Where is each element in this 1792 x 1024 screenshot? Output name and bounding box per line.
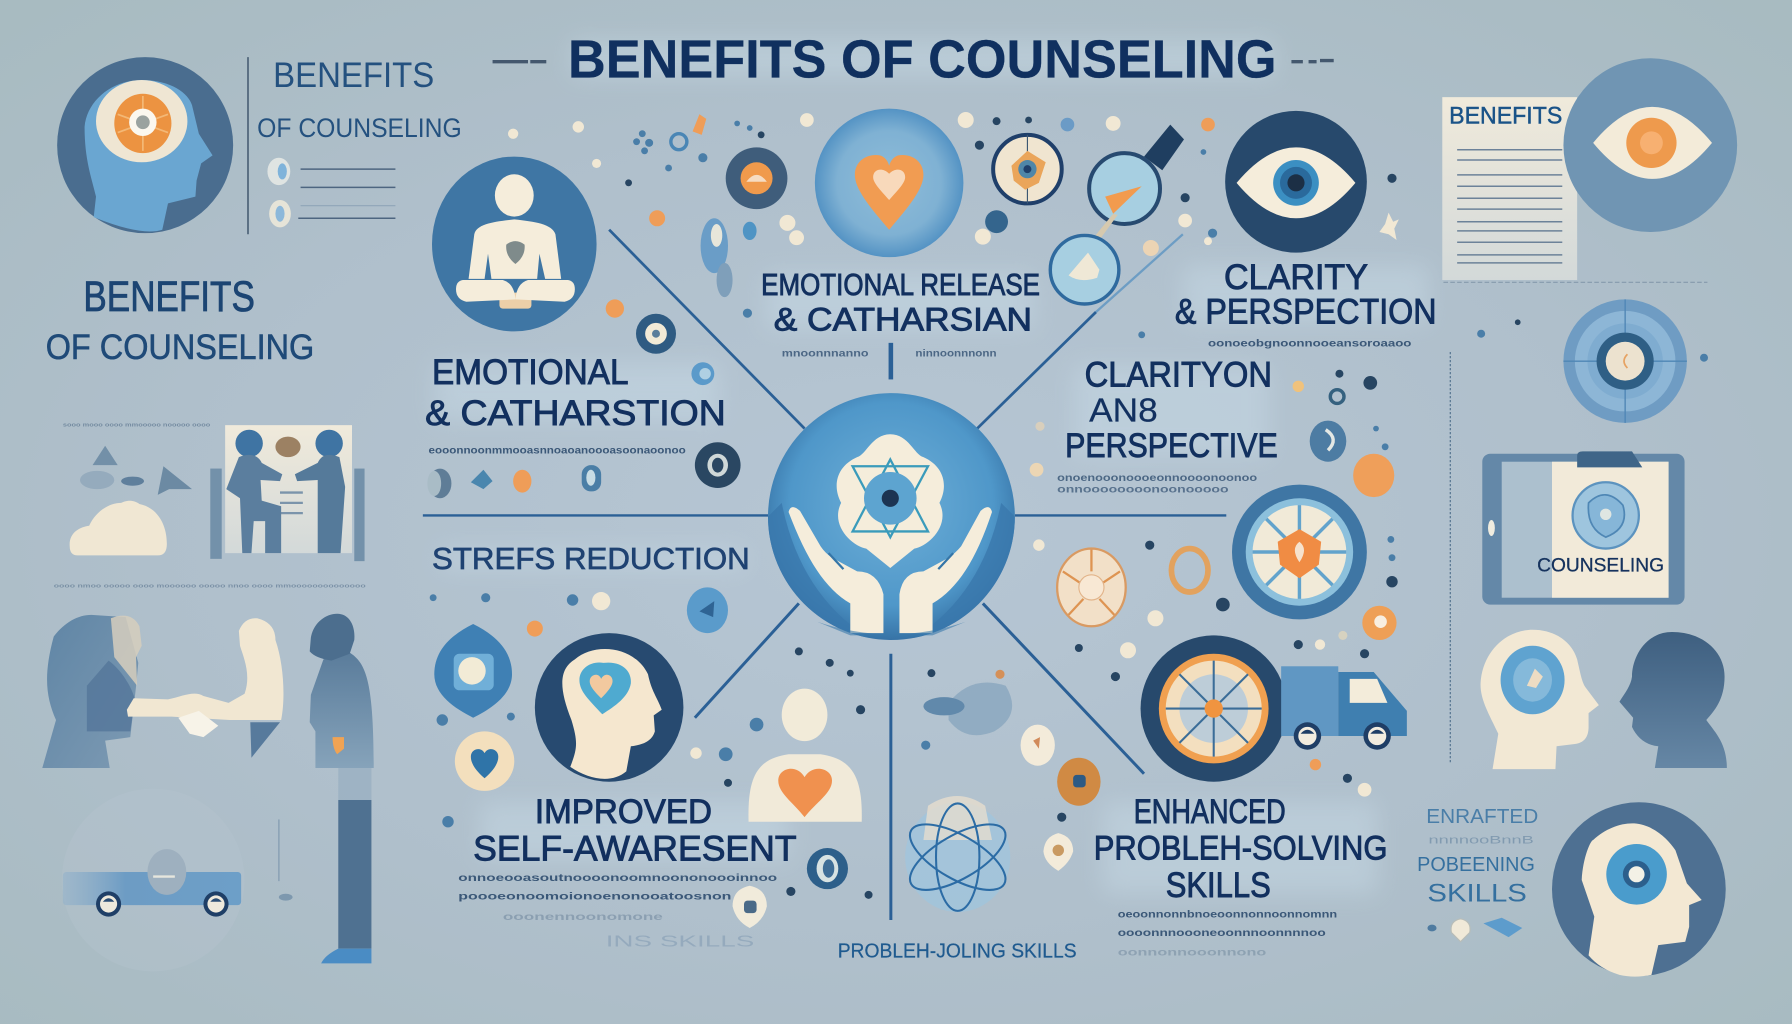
icon: wire globe [900,796,1015,912]
icon: top-left head with brain [57,57,233,233]
panel: clipboard counseling [1482,451,1685,605]
heading: clarityon and perspective: PERSPECTIVE [1065,427,1278,465]
heading: improved self-awareness [458,793,797,950]
icon: steel-blue eye circle [1563,58,1737,232]
icon: heart circle [815,109,963,257]
icon: ringed target [993,135,1062,203]
heading: stress reduction: STREFS REDUCTION [432,541,750,576]
right faded caption [1417,805,1538,942]
illustration: handshake scene [42,614,374,963]
heading: improved self-awareness: onnoeooasoutnoooonoomnoononoooinnoo [458,873,777,884]
heading: clarity and perspection: & PERSPECTION [1175,291,1437,331]
heading: emotional and catharstion [425,352,726,457]
heading: emotional and catharstion: & CATHARSTION [425,393,726,433]
heading: enhanced problem-solving skills: SKILLS [1166,865,1271,905]
right faded caption: ENRAFTED [1426,805,1538,828]
heading: clarityon and perspective: AN8 [1089,393,1158,430]
right faded caption: POBEENING [1417,853,1535,876]
icon: bottom-right head with eye [1552,802,1726,977]
heading: improved self-awareness: INS SKILLS [606,933,754,950]
icon: blue leaf badge [434,624,512,718]
left large heading: BENEFITS [83,273,255,320]
icon: problem solving wheel [1141,635,1287,782]
heading: emotional release and catharsian: mnoonnnanno [782,349,869,360]
top-left heading block: OF COUNSELING [257,113,462,143]
heading: clarity and perspection: oonoeobgnoonnooeansoroaaoo [1208,338,1411,349]
heading: emotional and catharstion: eooonnoonmmooasnnoaoanoooasoonaoonoo [429,446,686,457]
heading: enhanced problem-solving skills: oooonnnoooneoonnnoonnnnoo [1118,928,1326,939]
icon: delivery truck [1281,666,1407,750]
illustration: two people meeting at paper [210,425,365,561]
heading: improved self-awareness: ooonennoonomone [503,912,663,923]
heading: emotional release and catharsian: ninnoonnnonn [915,349,997,360]
icon: large navy eye [1225,111,1367,253]
heading: enhanced problem-solving skills: ENHANCED [1134,793,1286,831]
icon: magnifiers [1050,125,1184,304]
heading: clarityon and perspective: onnoooooooonoonooooo [1057,485,1229,496]
radial connector lines [423,230,1226,920]
central hub: hands holding flower [768,393,1015,640]
heading: emotional release and catharsian: EMOTIONAL RELEASE [761,267,1040,302]
faint divider rules right [1443,282,1707,762]
top-left heading block: BENEFITS [273,55,434,95]
icon: meditating person [432,157,597,331]
icon: two facing heads [1481,630,1727,769]
panel: benefits document [1442,97,1577,280]
heading: enhanced problem-solving skills: oonnonnooonnono [1118,947,1266,958]
faint fine-print rules left: oooo nmoo ooooo oooo moooooo ooooo nnoo oooo mmoooooooooooooo [54,583,366,589]
heading: clarityon and perspective: onoenooonoooeonnoooonoonoo [1057,473,1257,484]
heading: improved self-awareness: SELF-AWARESENT [473,829,797,869]
heading: clarityon and perspective [1057,354,1278,496]
caption: problem solving skills: PROBLEH-JOLING SKILLS [838,941,1077,963]
heading: clarityon and perspective: CLARITYON [1085,354,1272,394]
small accent icons [427,299,1397,928]
faint fine-print rules left [54,422,366,589]
illustration: faded car [62,789,293,971]
icon: person with heart [748,689,862,822]
faint fine-print rules left: sooo mooo oooo mmooooo nooooo oooo [63,422,211,428]
panel: benefits document: BENEFITS [1449,102,1562,129]
left large heading [46,273,314,367]
title: BENEFITS OF COUNSELING [568,30,1277,90]
right faded caption: SKILLS [1427,880,1527,908]
heading: enhanced problem-solving skills: PROBLEH-SOLVING [1094,829,1387,867]
soft glow behind headings [434,40,1429,894]
heading: clarity and perspection: CLARITY [1224,257,1368,297]
icon: small dark circle with orange dome [726,147,787,209]
heading: enhanced problem-solving skills [1094,793,1387,958]
panel: clipboard counseling: COUNSELING [1537,554,1664,576]
heading: emotional release and catharsian [761,267,1040,360]
icon: target rings [1563,299,1687,423]
heading: enhanced problem-solving skills: oeoonnonnbnoeoonnonnoonnomnn [1118,910,1337,921]
heading: improved self-awareness: poooeonoomoionoenonooatoosnon [458,891,731,902]
icon: cream disc with blue heart [455,731,514,791]
left large heading: OF COUNSELING [46,327,314,367]
top-left heading block [248,55,462,234]
icon: cloud and faded shapes [70,446,192,555]
heading: emotional release and catharsian: & CATHARSIAN [774,301,1032,337]
icon: cream orb with orange web [1057,549,1126,626]
right faded caption: nnnnooBnnB [1429,834,1534,846]
heading: emotional and catharstion: EMOTIONAL [432,352,629,392]
icon: head with heart [535,633,683,782]
heading: clarity and perspection [1175,257,1437,349]
scattered particles [430,112,1708,899]
heading: improved self-awareness: IMPROVED [535,793,712,831]
icon: compass circle [1232,485,1367,619]
